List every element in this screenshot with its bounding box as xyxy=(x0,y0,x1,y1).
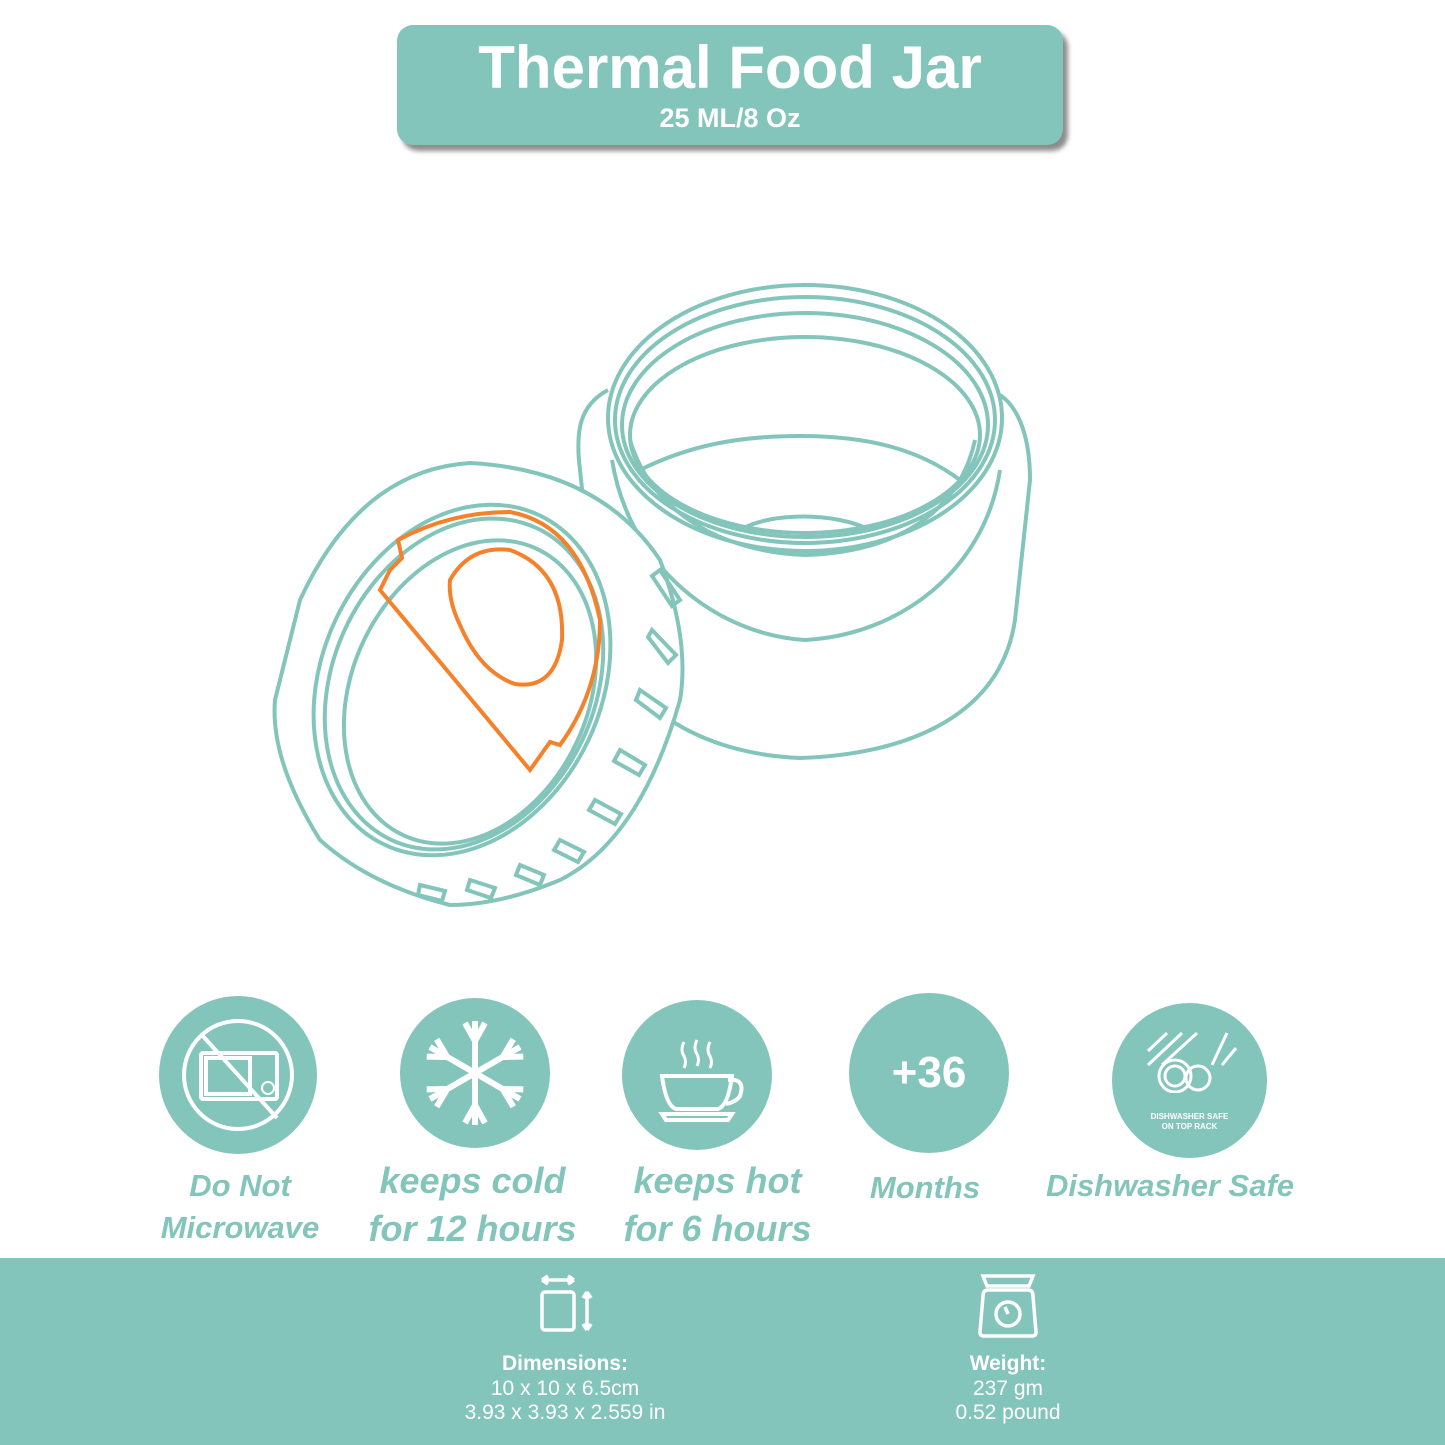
label: cold xyxy=(368,1160,577,1249)
label: hot: for 6 hours xyxy=(623,1208,812,1249)
subtitle: 25 ML/8 Oz xyxy=(659,103,801,133)
icon: +36: +36 xyxy=(892,1048,966,1097)
orange handle xyxy=(380,512,600,770)
dimensions block: 10 x 10 x 6.5cm xyxy=(491,1377,639,1400)
weight block: Weight: xyxy=(970,1352,1046,1375)
bottom band xyxy=(0,1258,1445,1445)
weight block: 237 gm xyxy=(973,1377,1043,1400)
dimensions block: 3.93 x 3.93 x 2.559 in xyxy=(465,1401,665,1424)
icon: hot cup xyxy=(622,1000,772,1150)
icon: +36 xyxy=(849,993,1009,1153)
label: microwave xyxy=(161,1168,319,1245)
icon: no microwave xyxy=(159,996,317,1154)
icon: dishwasher: ON TOP RACK xyxy=(1162,1122,1217,1131)
lid xyxy=(258,456,682,905)
label: months: Months xyxy=(870,1170,980,1205)
weight block xyxy=(955,1274,1061,1424)
label: microwave: Microwave xyxy=(161,1210,319,1245)
jar body xyxy=(578,285,1030,758)
weight block: 0.52 pound xyxy=(955,1401,1061,1424)
label: cold: keeps cold xyxy=(379,1160,566,1201)
label: microwave: Do Not xyxy=(189,1168,291,1203)
icon: scale xyxy=(978,1274,1038,1338)
icon: dishwasher: DISHWASHER SAFE xyxy=(1151,1112,1228,1121)
label: hot xyxy=(623,1160,812,1249)
icon: dishwasher xyxy=(1112,1003,1267,1158)
label: cold: for 12 hours xyxy=(368,1208,577,1249)
title banner xyxy=(397,25,1063,145)
label: dishwasher: Dishwasher Safe xyxy=(1046,1168,1294,1203)
dimensions block xyxy=(465,1274,665,1424)
dimensions block: Dimensions: xyxy=(502,1352,628,1375)
icon: dimensions xyxy=(540,1274,592,1332)
icon: snowflake xyxy=(400,998,550,1148)
label: hot: keeps hot xyxy=(633,1160,802,1201)
title: Thermal Food Jar xyxy=(478,34,982,101)
jar illustration xyxy=(272,283,1032,907)
